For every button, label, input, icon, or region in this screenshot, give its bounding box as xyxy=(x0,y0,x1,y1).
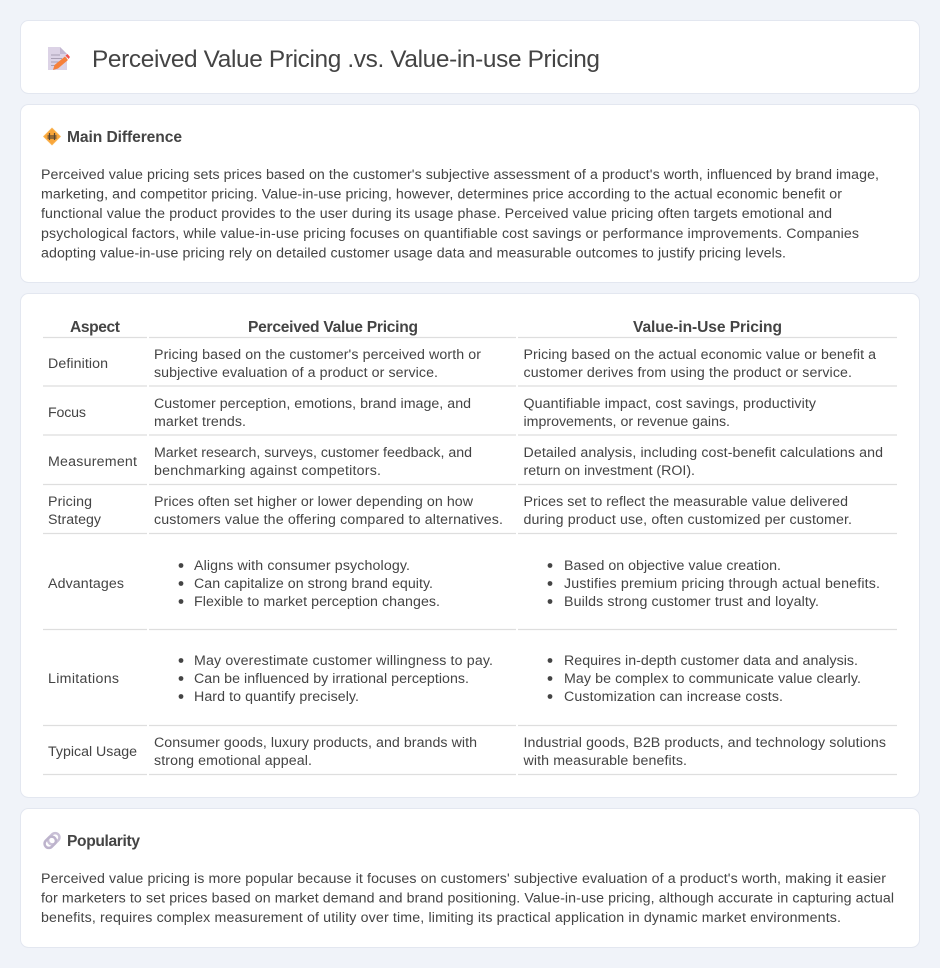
row: limitations: Limitations xyxy=(48,671,119,687)
row: definition: Pricing based on the customer's perceived worth or xyxy=(154,347,481,363)
row: typical usage xyxy=(48,735,886,769)
text block: popularity paragraph: for marketers to set prices based on market demand and brand positioning. Value-in-use pricing, although accurate in capturing actual xyxy=(41,890,894,906)
row: limitations: May be complex to communicate value clearly. xyxy=(564,671,861,687)
row: definition xyxy=(48,347,876,381)
row: measurement: Detailed analysis, including cost-benefit calculations and xyxy=(524,445,883,461)
text block: main difference paragraph xyxy=(41,167,879,261)
icon: road sign diamond xyxy=(44,128,60,145)
table header row: Value-in-Use Pricing xyxy=(633,319,782,336)
row: advantages xyxy=(48,558,880,610)
row: advantages: Advantages xyxy=(48,576,124,592)
row: definition: Definition xyxy=(48,356,108,372)
row: limitations: May overestimate customer willingness to pay. xyxy=(194,653,493,669)
row: typical usage: Typical Usage xyxy=(48,744,137,760)
row: pricing strategy xyxy=(48,494,852,528)
text block: popularity paragraph: Perceived value pricing is more popular because it focuses on customers' subjective evaluation of a product's worth, making it easier xyxy=(41,871,886,887)
row: limitations: Customization can increase costs. xyxy=(564,689,783,705)
table header row: Aspect xyxy=(70,319,120,336)
row: definition: Pricing based on the actual economic value or benefit a xyxy=(524,347,876,363)
row: focus: Customer perception, emotions, brand image, and xyxy=(154,396,471,412)
text block: popularity paragraph: benefits, requires complex measurement of utility over time, limiting its practical application in dynamic market environments. xyxy=(41,910,841,926)
row: advantages: Builds strong customer trust and loyalty. xyxy=(564,594,819,610)
text block: main difference paragraph: psychological factors, while value-in-use pricing focuses on quantifiable cost savings or performance improvements. Companies xyxy=(41,226,859,242)
row: typical usage: strong emotional appeal. xyxy=(154,753,312,769)
row: pricing strategy: Prices often set higher or lower depending on how xyxy=(154,494,474,510)
heading: popularity: Popularity xyxy=(67,833,140,850)
row: measurement: benchmarking against competitors. xyxy=(154,463,381,479)
row: advantages: Aligns with consumer psychology. xyxy=(194,558,410,574)
row: measurement: Measurement xyxy=(48,454,137,470)
row: definition: subjective evaluation of a product or service. xyxy=(154,365,438,381)
icon: link xyxy=(43,831,61,850)
panel: main difference xyxy=(20,104,920,282)
panel: title header xyxy=(20,20,920,94)
row: typical usage: Consumer goods, luxury products, and brands with xyxy=(154,735,477,751)
row: pricing strategy: Pricing xyxy=(48,494,92,510)
row: advantages: Flexible to market perception changes. xyxy=(194,594,440,610)
row: pricing strategy: during product use, often customized per customer. xyxy=(524,512,852,528)
text block: main difference paragraph: Perceived value pricing sets prices based on the customer's subjective assessment of a product's worth, influenced by brand image, xyxy=(41,167,879,183)
heading: main difference: Main Difference xyxy=(67,129,182,146)
row: advantages: Based on objective value creation. xyxy=(564,558,781,574)
row: focus xyxy=(48,396,817,430)
row: focus: Focus xyxy=(48,405,86,421)
row: pricing strategy: Prices set to reflect the measurable value delivered xyxy=(524,494,848,510)
text block: main difference paragraph: functional value the product provides to the user during its usage phase. Perceived value pricing often targets emotional and xyxy=(41,206,832,222)
row: limitations: Can be influenced by irrational perceptions. xyxy=(194,671,469,687)
panel: popularity xyxy=(20,808,920,948)
text block: main difference paragraph: adopting value-in-use pricing rely on detailed customer usage data and measurable outcomes to justify pricing levels. xyxy=(41,245,786,261)
title: Perceived Value Pricing .vs. Value-in-use Pricing xyxy=(92,46,600,73)
row: advantages: Justifies premium pricing through actual benefits. xyxy=(564,576,880,592)
row: focus: market trends. xyxy=(154,414,246,430)
row: pricing strategy: customers value the offering compared to alternatives. xyxy=(154,512,503,528)
row: measurement xyxy=(48,445,883,479)
row: measurement: return on investment (ROI). xyxy=(524,463,695,479)
row: typical usage: Industrial goods, B2B products, and technology solutions xyxy=(524,735,886,751)
text block: main difference paragraph: marketing, and competitor pricing. Value-in-use pricing, however, determines price according to the actual economic benefit or xyxy=(41,187,842,203)
text block: popularity paragraph xyxy=(41,871,894,926)
row: limitations: Hard to quantify precisely. xyxy=(194,689,359,705)
row: definition: customer derives from using the product or service. xyxy=(524,365,852,381)
panel: comparison table xyxy=(20,294,920,798)
icon: document with pencil xyxy=(48,47,70,70)
row: focus: improvements, or revenue gains. xyxy=(524,414,730,430)
row: focus: Quantifiable impact, cost savings, productivity xyxy=(524,396,817,412)
row: pricing strategy: Strategy xyxy=(48,512,102,528)
row: limitations: Requires in-depth customer data and analysis. xyxy=(564,653,858,669)
table header row xyxy=(70,319,782,336)
row: typical usage: with measurable benefits. xyxy=(522,753,687,769)
row: limitations xyxy=(48,653,861,705)
table header row: Perceived Value Pricing xyxy=(248,319,418,336)
row: measurement: Market research, surveys, customer feedback, and xyxy=(154,445,472,461)
row: advantages: Can capitalize on strong brand equity. xyxy=(194,576,433,592)
